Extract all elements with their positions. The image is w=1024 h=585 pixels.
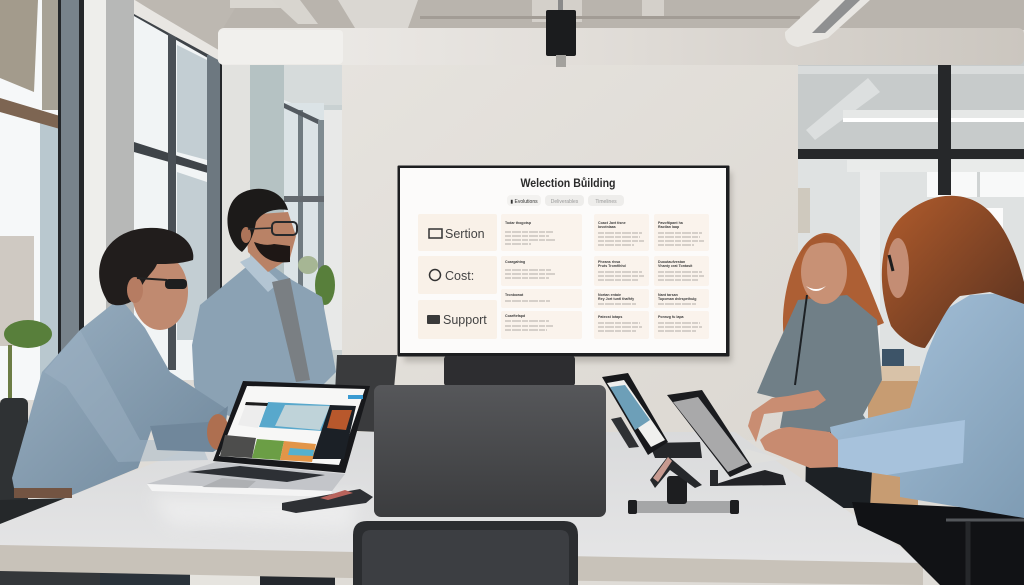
foreground chair [353, 521, 578, 585]
corridor behind left [222, 60, 342, 400]
detail card text: Coact Javt tisne [598, 221, 626, 225]
detail card text: Pheans rlvsa [598, 260, 621, 264]
ceiling duct [218, 0, 1024, 65]
section card: Sertion [445, 227, 485, 241]
screen title: Welection Bůilding [520, 178, 616, 190]
stand [628, 456, 739, 514]
under table items [0, 565, 335, 585]
person: man seated [12, 228, 229, 498]
detail card text: Ponnzg fu lapa [658, 315, 685, 319]
tablet 2 [667, 390, 786, 486]
detail card text: Nant tarsan [658, 293, 678, 297]
detail card text: Pavoftipant ha [658, 221, 684, 225]
screen tabs [507, 195, 624, 206]
detail card text: Vhanty crat Tontasit [658, 264, 693, 268]
far window [284, 103, 324, 343]
left windows [0, 0, 324, 400]
detail card text: Patecst lotaps [598, 315, 622, 319]
table reflection [150, 495, 360, 530]
detail card text: Todar thogotsp [505, 221, 532, 225]
person: woman seated [760, 196, 1024, 585]
right glass partition [798, 55, 1024, 428]
cost card: Cost: [445, 269, 474, 283]
detail card text: Ractlan laap [658, 225, 680, 229]
detail card text: Duoutaufvestan [658, 260, 685, 264]
tablets right [602, 373, 786, 514]
detail card text: Nortan entaie [598, 293, 621, 297]
detail cards [501, 214, 709, 339]
dark frame [58, 0, 84, 400]
ceiling [135, 0, 1024, 55]
plant [4, 256, 335, 400]
back laptop behind table [333, 355, 397, 432]
detail card text: Tupoman dvlrspethulg [658, 297, 696, 301]
tablet 1 [602, 373, 702, 458]
detail card text: Pruts Tromfihhd [598, 264, 626, 268]
detail card text: Coarftefapd [505, 314, 525, 318]
phone on table [282, 489, 373, 513]
detail card text: Iovotnlaas [598, 225, 616, 229]
pillar [84, 0, 108, 400]
screen tabs: ▮ Evolutions [510, 199, 538, 205]
left chair [0, 398, 70, 526]
presentation wall [342, 58, 798, 440]
projector [546, 0, 576, 67]
table surface [0, 432, 925, 585]
left category cards [418, 214, 497, 339]
centre window [134, 0, 222, 380]
person: woman standing [748, 233, 884, 508]
detail card text: Rey Jort tuntl thafhfy [598, 297, 634, 301]
detail card text: Tronbowat [505, 293, 524, 297]
desk at back right [868, 349, 920, 507]
detail placeholder lines [505, 232, 704, 331]
detail card text: Coargahtng [505, 260, 525, 264]
shadow behind screen [404, 172, 732, 362]
screen tabs: Deliverables [551, 199, 579, 205]
detail card text [505, 221, 696, 319]
laptop: website [147, 381, 370, 497]
far left window [0, 0, 60, 400]
small device [611, 417, 639, 448]
screen tabs: Timelines [595, 199, 617, 205]
wall screen [398, 166, 730, 356]
support card: Support [443, 313, 487, 327]
person: man standing [192, 189, 336, 420]
keyboard [745, 449, 782, 464]
closed laptop centre [374, 356, 606, 517]
